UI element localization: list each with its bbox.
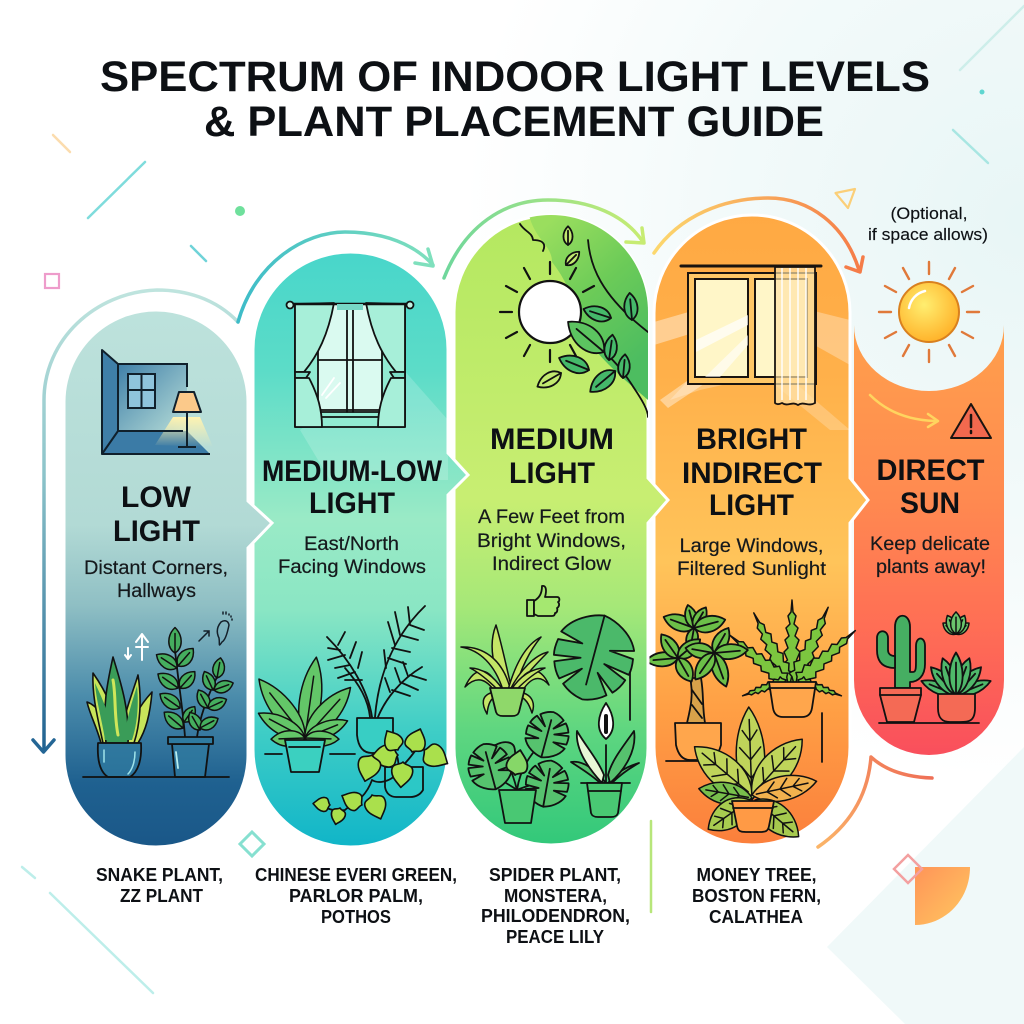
title [100,53,930,146]
arrow: teal to medium-low [238,232,433,322]
arrow: orange to direct sun [654,198,863,272]
pill shape: bright indirect [654,215,868,845]
description: medium [477,507,626,575]
labels: bright indirect plants [692,865,821,927]
heading: direct sun [876,454,984,520]
arrow: green to medium [444,200,644,278]
plant: money tree [645,604,822,762]
icon: room corner with lamp [102,350,213,454]
heading: bright indirect light [682,423,822,522]
labels: medium-low plants [255,865,457,927]
description: medium: A Few Feet from [478,507,625,528]
heading: medium-low light: LIGHT [309,487,395,520]
heading: low light: LOW [121,481,192,514]
plant: zz plant [83,628,235,777]
description: low light: Distant Corners, [84,558,228,579]
description: medium-low: Facing Windows [278,557,426,578]
optional note [868,204,988,244]
labels: medium plants: SPIDER PLANT, [489,865,621,885]
description: bright indirect: Filtered Sunlight [677,559,827,580]
panel: bright indirect light [645,215,868,847]
description: direct sun: plants away! [876,557,986,578]
labels: low light plants [96,865,223,906]
heading: direct sun: SUN [900,487,960,520]
pill shape: direct sun [854,325,1004,755]
panel: direct sun [854,204,1004,755]
icon: bright window with sheer curtain [681,266,821,405]
description: medium: Bright Windows, [477,531,626,552]
description: direct sun [870,534,990,578]
heading: low light: LIGHT [113,515,200,548]
description: low light: Hallways [117,581,196,602]
description: direct sun: Keep delicate [870,534,990,555]
heading: bright indirect light: LIGHT [709,489,794,522]
labels: medium plants [481,865,630,947]
description: medium: Indirect Glow [492,554,611,575]
plants: cactus and succulents [877,612,993,723]
foliage background [529,215,648,400]
plant: spider plant [461,625,549,716]
labels: bright indirect plants: CALATHEA [709,907,803,927]
heading: medium-low light: MEDIUM-LOW [262,455,443,488]
plant: chinese evergreen [250,656,384,772]
labels: medium plants: PHILODENDRON, [481,906,630,926]
plant: monstera [544,605,643,720]
icon: sun through leaves [500,224,648,417]
heading: medium-low light [262,455,443,520]
description: medium-low: East/North [304,534,399,555]
icon: white up and down arrows [125,634,148,660]
light beams [656,312,848,430]
heading: medium light: MEDIUM [490,423,614,456]
arrow: return curve [818,757,932,847]
labels: medium plants: MONSTERA, [504,886,607,906]
labels: low light plants: ZZ PLANT [120,886,203,906]
description: bright indirect: Large Windows, [680,536,824,557]
description: bright indirect [677,536,827,580]
pill shape: medium [454,215,668,845]
pill shape: medium-low [253,252,468,847]
optional note: (Optional, [890,204,968,223]
heading: medium light: LIGHT [509,457,595,490]
heading: low light [113,481,200,548]
icon: warning [951,404,991,438]
labels: medium-low plants: PARLOR PALM, [289,886,423,906]
plant: boston fern [725,600,861,717]
panel: medium-low light [250,252,468,847]
labels: bright indirect plants: BOSTON FERN, [692,886,821,906]
panel: medium light [454,215,668,845]
window glow [300,360,448,480]
optional note: if space allows) [868,225,988,244]
icon: window with curtains [286,302,414,427]
heading: bright indirect light: INDIRECT [682,457,822,490]
heading: medium light [490,423,614,490]
icon: sun [879,262,979,362]
labels: medium plants: PEACE LILY [506,927,604,947]
pill shape: low light [64,310,272,847]
heading: bright indirect light: BRIGHT [696,423,807,456]
icon: footprint with arrow [199,612,232,645]
plant: snake plant [87,657,152,777]
arrow: blue down left [33,290,238,752]
plant: parlor palm [327,606,426,717]
title: SPECTRUM OF INDOOR LIGHT LEVELS [100,53,930,101]
title: & PLANT PLACEMENT GUIDE [204,98,824,146]
labels: medium-low plants: CHINESE EVERI GREEN, [255,865,457,885]
heading: direct sun: DIRECT [876,454,984,487]
icon: thumbs up [527,586,559,616]
description: low light [84,558,228,602]
description: medium-low [278,534,426,578]
plant: pothos [312,718,453,826]
labels: medium-low plants: POTHOS [321,907,391,927]
labels: low light plants: SNAKE PLANT, [96,865,223,885]
plant: philodendron [463,707,574,823]
plant: calathea [685,707,819,847]
plant: peace lily [571,703,639,817]
panel: low light [64,310,272,847]
labels: bright indirect plants: MONEY TREE, [696,865,816,885]
arrow: sun direction [870,395,938,427]
